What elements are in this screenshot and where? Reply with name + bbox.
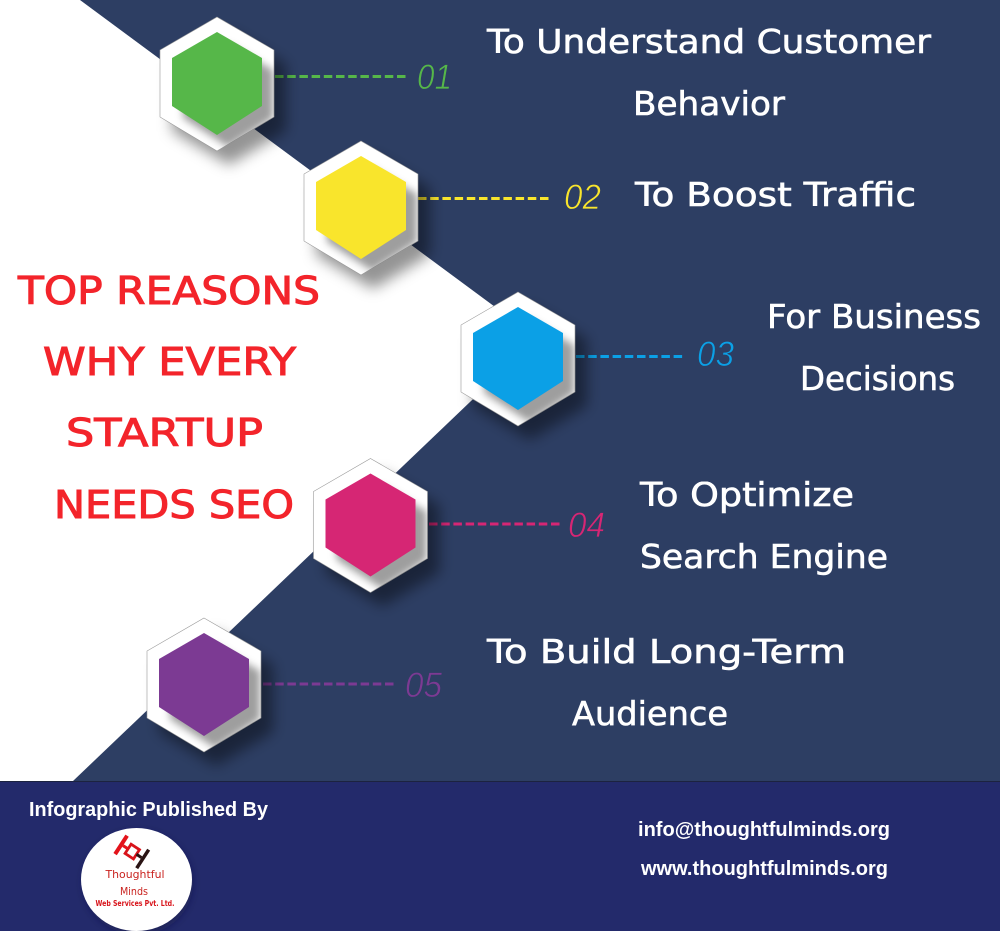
connector 04 — [429, 522, 562, 526]
number 05: 05 — [405, 666, 443, 705]
contact website: www.thoughtfulminds.org — [640, 858, 888, 880]
logo text: Web Services Pvt. Ltd. — [96, 899, 175, 908]
logo text — [96, 868, 175, 908]
title: NEEDS SEO — [54, 483, 294, 527]
number 04: 04 — [568, 506, 605, 545]
number 01: 01 — [417, 58, 452, 97]
reason 03 text — [767, 297, 981, 398]
title — [17, 269, 320, 527]
hexagon 04 pink — [314, 458, 440, 606]
background: white chevron panel — [0, 0, 537, 781]
footer band — [0, 781, 1000, 931]
hexagon 05 purple — [147, 618, 273, 766]
connector 01 — [275, 75, 407, 78]
logo badge — [81, 828, 193, 931]
reason 05 text — [486, 632, 846, 733]
logo mark — [113, 835, 150, 869]
contact email: info@thoughtfulminds.org — [638, 819, 890, 841]
title: STARTUP — [66, 411, 263, 455]
logo text: Minds — [120, 885, 148, 898]
hexagon 02 yellow — [304, 141, 430, 289]
reason 04 text: To Optimize — [639, 475, 854, 514]
reason 02 text: To Boost Traffic — [634, 175, 916, 214]
number 03: 03 — [697, 335, 735, 374]
title: TOP REASONS — [17, 269, 320, 313]
connector 05 — [263, 682, 395, 686]
footer heading: Infographic Published By — [29, 799, 269, 821]
reason 01 text — [486, 22, 931, 123]
logo text: Thoughtful — [105, 868, 164, 881]
hexagon 01 green — [160, 17, 286, 165]
reason 03 text: Decisions — [800, 359, 955, 398]
reason 01 text: To Understand Customer — [486, 22, 931, 61]
hexagon 03 blue — [461, 292, 587, 440]
reason 04 text: Search Engine — [640, 537, 888, 576]
connector 03 — [576, 355, 683, 358]
connector 02 — [418, 197, 550, 200]
title: WHY EVERY — [43, 340, 297, 384]
number 02: 02 — [564, 178, 601, 217]
reason 01 text: Behavior — [633, 84, 785, 123]
reason 03 text: For Business — [767, 297, 981, 336]
reason 05 text: To Build Long-Term — [486, 632, 846, 671]
reason 04 text — [639, 475, 888, 576]
reason 05 text: Audience — [572, 694, 728, 733]
